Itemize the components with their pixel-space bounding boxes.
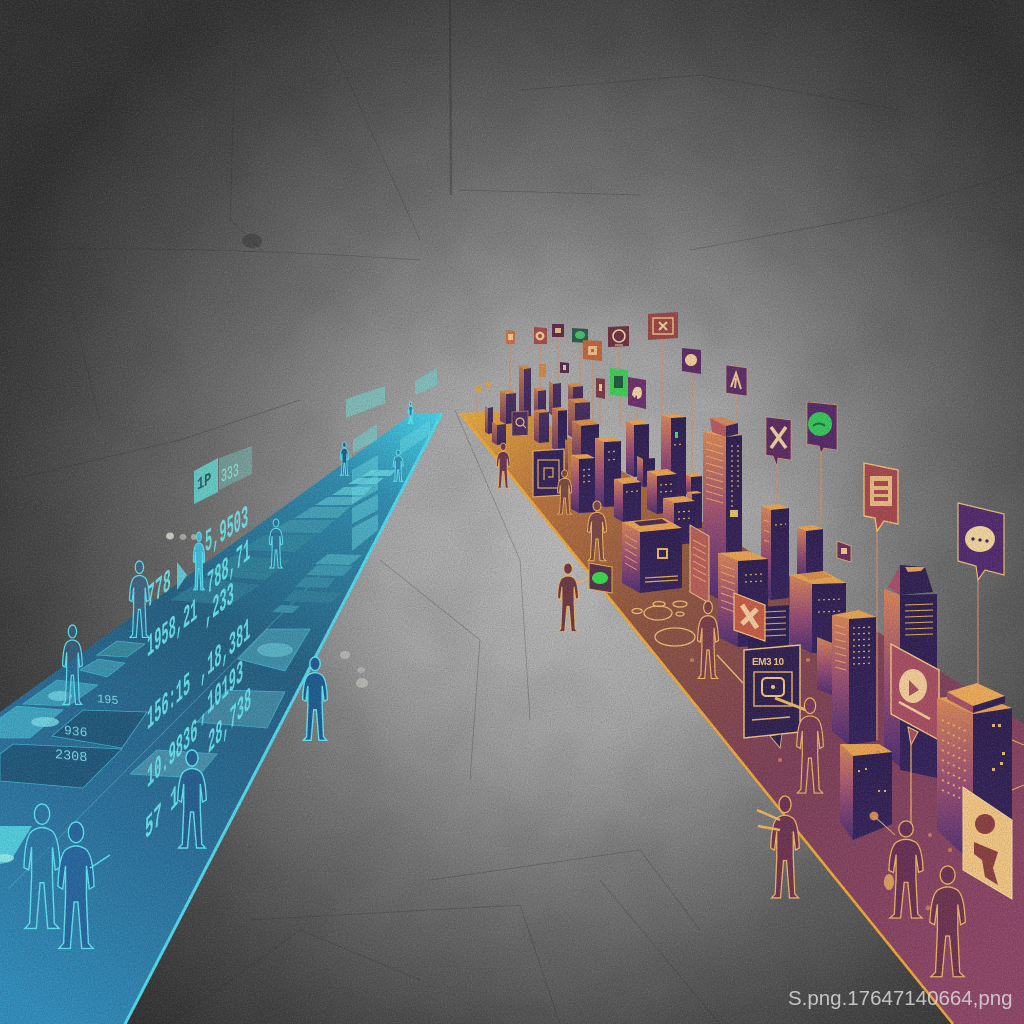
sign 12	[596, 378, 605, 425]
person far 2	[393, 450, 403, 481]
floating data boards far end: 1P	[197, 469, 211, 496]
blue data road	[0, 413, 442, 1024]
green small sign	[578, 563, 612, 593]
warm people	[496, 443, 965, 977]
person far 3	[340, 442, 349, 475]
floating data numbers: 156:15	[147, 666, 190, 740]
road doodles	[632, 601, 743, 683]
play sign	[891, 644, 939, 825]
stepped top tower 36	[937, 683, 1024, 864]
sign 14	[539, 364, 546, 377]
person mid	[178, 750, 206, 848]
man foreground	[930, 866, 965, 977]
sign 20 small	[837, 541, 851, 562]
social signs on poles	[475, 312, 1004, 740]
video sign board: EM3 10	[752, 657, 784, 668]
floating data numbers: 788,71	[207, 532, 250, 604]
sign 17 green chat	[807, 402, 837, 525]
sign 16 star	[766, 417, 791, 505]
block 30	[790, 571, 846, 653]
person at spiral sign	[557, 470, 572, 514]
person far 1	[408, 402, 413, 424]
floating data boards far end	[166, 368, 437, 688]
person with doodles	[698, 601, 718, 678]
person far edge	[496, 443, 510, 488]
man in foreground	[58, 822, 94, 948]
floating data numbers: 57 11	[145, 768, 187, 849]
floating data boards far end: 333	[221, 461, 239, 488]
person at road edge	[303, 657, 327, 740]
blue people	[24, 402, 413, 948]
sign 15	[475, 382, 492, 412]
road panels: 936	[64, 723, 87, 740]
far buildings cluster	[485, 365, 742, 603]
sign 18 document	[864, 463, 898, 740]
road panels: 2308	[55, 748, 87, 766]
block 35	[840, 744, 895, 840]
person on panels	[269, 519, 283, 568]
bright person	[193, 532, 205, 590]
floating data numbers: 1958,21	[147, 593, 197, 667]
floating data numbers: 778	[147, 562, 171, 618]
sign 11	[628, 377, 646, 421]
warm city road	[460, 410, 1024, 1024]
tower 28	[761, 504, 789, 600]
floating data numbers: 5,9503	[205, 501, 248, 562]
person with green sign	[558, 563, 578, 632]
tower 29	[797, 525, 823, 579]
sign 1	[506, 330, 515, 390]
road panels	[0, 470, 396, 864]
sign 6	[608, 326, 629, 370]
video sign board	[744, 645, 806, 748]
floating data numbers: ,18,381	[200, 612, 250, 692]
sign 10 green	[610, 368, 628, 425]
near buildings	[718, 504, 1024, 899]
sign 4	[572, 328, 588, 385]
sign 8	[682, 348, 701, 473]
tower group	[571, 414, 702, 545]
floating data numbers: ,10193	[200, 653, 243, 732]
sign 5	[583, 340, 602, 420]
person mid road	[588, 501, 606, 561]
floating data numbers: ,233	[205, 577, 234, 634]
spiral sign	[533, 449, 564, 497]
tower 32	[832, 610, 876, 745]
large cube building	[622, 518, 682, 593]
block 27	[718, 551, 768, 647]
person card	[963, 787, 1012, 899]
striped dark block	[748, 605, 789, 649]
far building row	[485, 365, 599, 475]
person at video sign	[797, 698, 823, 793]
floating data numbers	[145, 501, 251, 849]
person left	[63, 625, 82, 704]
person looking at numbers	[130, 561, 149, 637]
road panels: 195	[97, 692, 119, 708]
orange stripe panel	[690, 525, 709, 603]
sign 9	[726, 365, 747, 418]
floating data numbers: 10.9836	[147, 712, 197, 798]
woman gesturing	[757, 796, 799, 898]
sign 3	[552, 324, 564, 380]
magnifier sign	[512, 411, 528, 436]
peaked tower 33	[884, 565, 937, 778]
sign 19 chat	[958, 503, 1004, 685]
orange X sign	[734, 593, 765, 641]
low face 31	[817, 637, 832, 695]
floating data numbers: 28,738	[208, 680, 251, 764]
watermark filename: S.png.17647140664,png	[788, 987, 1013, 1010]
woman with bags	[884, 821, 923, 918]
sign 7	[648, 312, 678, 415]
tall tower with roof block	[703, 417, 742, 603]
road dots	[690, 658, 952, 910]
woman in foreground	[24, 804, 60, 928]
sign 2	[534, 327, 547, 388]
sign 13	[560, 362, 569, 373]
